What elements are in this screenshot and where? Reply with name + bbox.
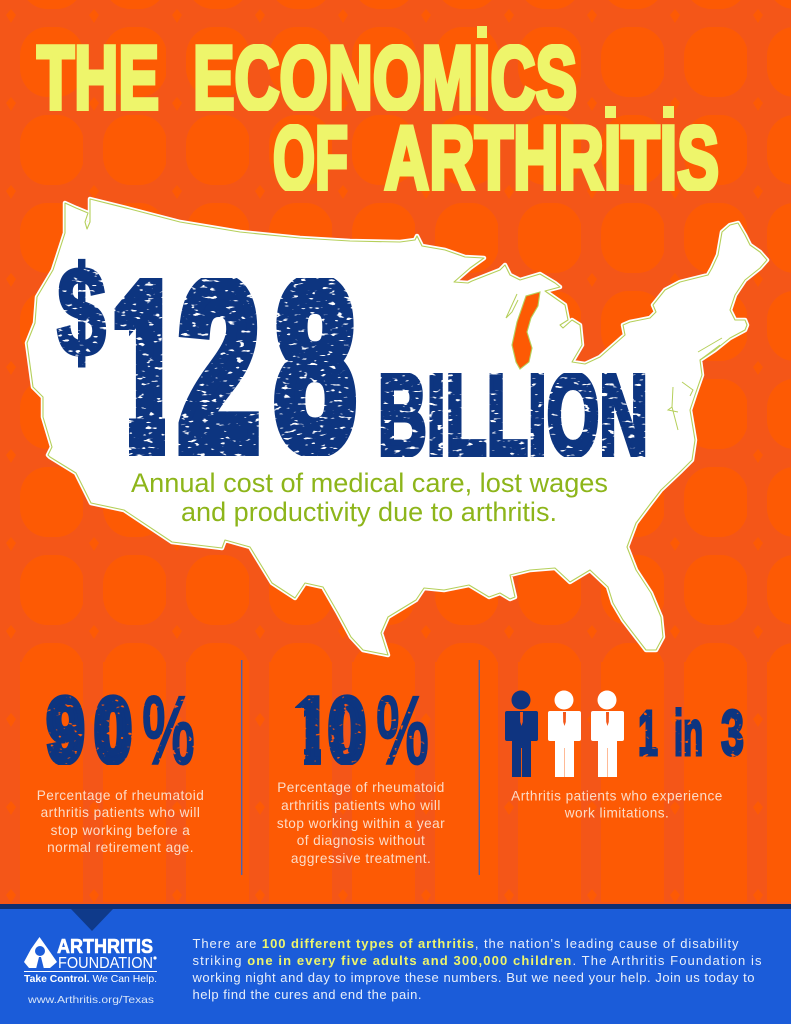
stat: 10% — [277, 694, 444, 866]
footer paragraph: help find the cures and end the pain. — [192, 987, 422, 1002]
footer paragraph: There are 100 different types of arthritis, the nation's leading cause of disability — [192, 936, 739, 951]
stat text: 10%: of diagnosis without — [297, 833, 425, 848]
stat: 10%: % — [376, 675, 429, 785]
footer band — [0, 904, 791, 1024]
map caption: Annual cost of medical care, lost wages — [131, 468, 608, 498]
one in three label: 1 — [638, 697, 658, 769]
title — [36, 26, 718, 191]
stat: 10%: 0 — [328, 681, 366, 781]
stat: 90%: % — [142, 675, 195, 785]
pointer triangle — [71, 909, 113, 931]
title: ECONOMICS — [193, 28, 577, 130]
stat text: 1 in 3 — [511, 788, 723, 820]
stat text: 90%: arthritis patients who will — [41, 805, 200, 820]
stat text: 90%: Percentage of rheumatoid — [37, 788, 204, 803]
stat: 10%: 1 — [293, 680, 329, 782]
stat text: 90%: normal retirement age. — [47, 840, 194, 855]
stat text: 10%: Percentage of rheumatoid — [277, 780, 445, 795]
stat text: 10%: arthritis patients who will — [281, 798, 441, 813]
stat: 1 in 3 with people icons — [505, 690, 744, 820]
column dividers — [241, 660, 480, 875]
stat text: 10% — [277, 780, 445, 866]
stat: 90% — [38, 694, 203, 855]
one in three label — [638, 697, 744, 769]
logo: Arthritis Foundation: FOUNDATION — [58, 955, 153, 972]
stat: 90%: 0 — [94, 681, 132, 781]
stat text: 1 in 3: work limitations. — [564, 806, 669, 820]
logo: Arthritis Foundation: ARTHRITIS — [57, 936, 153, 958]
title: OF — [273, 108, 348, 210]
footer paragraph: working night and day to improve these numbers. But we need your help. Join us today to — [192, 970, 754, 985]
footer paragraph: striking one in every five adults and 300,000 children. The Arthritis Foundation is — [192, 953, 762, 968]
stat: 90%: 9 — [47, 681, 84, 781]
big figure: $128 billion: 2 — [179, 234, 259, 498]
logo: Arthritis Foundation — [24, 936, 157, 985]
website: www.Arthritis.org/Texas — [27, 995, 154, 1006]
big figure: $128 billion: $ — [57, 241, 106, 384]
big figure: $128 billion: 8 — [275, 234, 355, 498]
stat text: 90% — [37, 788, 204, 855]
stat text: 1 in 3: Arthritis patients who experience — [511, 788, 723, 804]
footer paragraph — [192, 936, 762, 1002]
map caption — [131, 468, 608, 527]
map caption: and productivity due to arthritis. — [181, 497, 557, 527]
big figure: $128 billion: 1 — [110, 234, 182, 502]
map of the United States — [27, 199, 767, 655]
logo: Arthritis Foundation: Take Control. We Can Help. — [24, 973, 157, 985]
one in three label: 3 — [721, 697, 744, 769]
icon: navy person — [505, 690, 538, 777]
stat text: 10%: aggressive treatment. — [291, 851, 431, 866]
logo icon — [24, 937, 57, 969]
stat text: 10%: stop working within a year — [277, 816, 445, 831]
big figure: $128 billion — [56, 258, 646, 457]
title: THE — [37, 28, 159, 130]
one in three label: in — [674, 697, 703, 769]
stat text: 90%: stop working before a — [51, 823, 190, 838]
icon: white person — [591, 690, 624, 777]
icon: white person — [548, 690, 581, 777]
